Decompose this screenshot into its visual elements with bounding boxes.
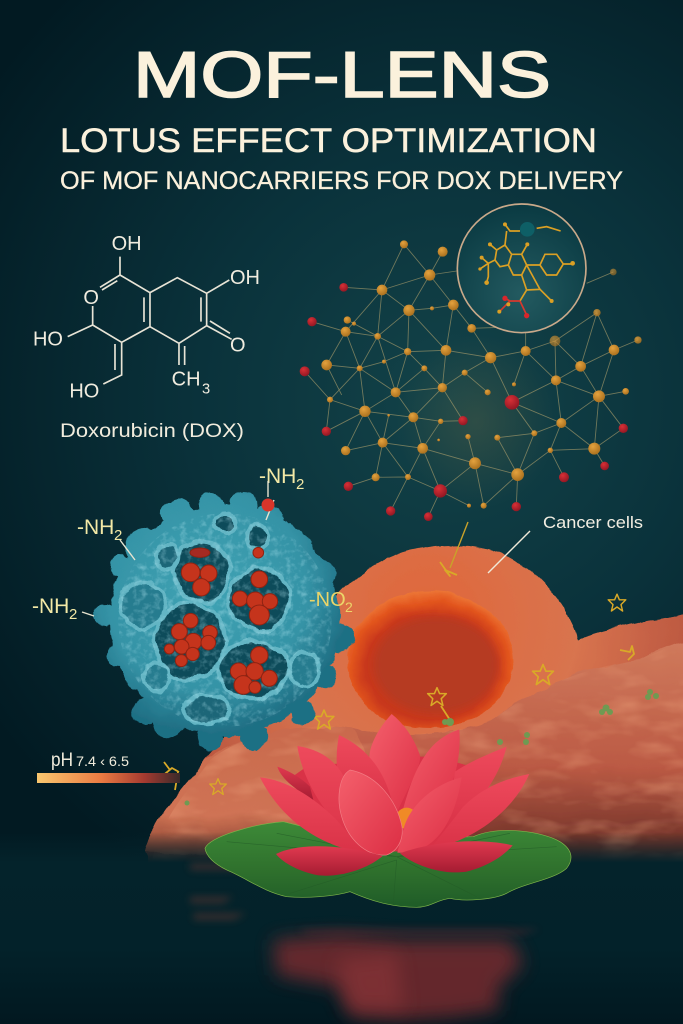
pores [122, 515, 320, 723]
amine label left upper: -NH [77, 516, 114, 539]
nitro label: -NO [309, 589, 346, 611]
drug clusters [164, 547, 278, 694]
doxorubicin structure: O [83, 287, 99, 309]
doxorubicin structure: CH [172, 369, 201, 391]
magnified molecule inset [457, 204, 586, 333]
doxorubicin structure: 3 [202, 381, 210, 397]
amine label top: -NH [259, 465, 296, 488]
doxorubicin structure: HO [33, 328, 63, 350]
amine label top: 2 [296, 476, 304, 493]
amine label left lower: 2 [69, 606, 77, 623]
lily pad leaf [205, 822, 571, 907]
green particles [184, 689, 659, 806]
nitro label: 2 [345, 599, 353, 615]
water [0, 832, 683, 1024]
amine label left lower [32, 595, 94, 623]
lotus flower [260, 714, 529, 876]
doxorubicin label: Doxorubicin (DOX) [60, 420, 244, 442]
doxorubicin structure: HO [69, 380, 99, 402]
doxorubicin structure: OH [112, 233, 142, 255]
doxorubicin structure [33, 233, 260, 402]
floating ligands and stars [160, 562, 634, 794]
title: MOF-LENS [133, 38, 551, 111]
amine label left upper [77, 516, 135, 560]
particle body [93, 491, 355, 750]
pH gradient label: 7.4 ‹ 6.5 [76, 753, 129, 769]
doxorubicin structure: OH [230, 267, 260, 289]
surface texture [118, 513, 332, 727]
cancer cells label [450, 514, 643, 573]
doxorubicin structure: O [230, 335, 246, 357]
water reflection [190, 863, 540, 1020]
pH gradient label [37, 750, 180, 783]
amine label left lower: -NH [32, 595, 69, 618]
MOF network [300, 240, 642, 521]
subtitle line two: OF MOF NANOCARRIERS FOR DOX DELIVERY [60, 167, 623, 195]
MOF nanoparticle [93, 491, 355, 750]
amine label left upper: 2 [114, 527, 122, 544]
pH gradient label: pH [51, 750, 73, 771]
subtitle line one: LOTUS EFFECT OPTIMIZATION [60, 122, 597, 160]
cancer cells label: Cancer cells [543, 514, 643, 532]
tumor mass [146, 544, 683, 870]
amine label top [259, 465, 304, 520]
